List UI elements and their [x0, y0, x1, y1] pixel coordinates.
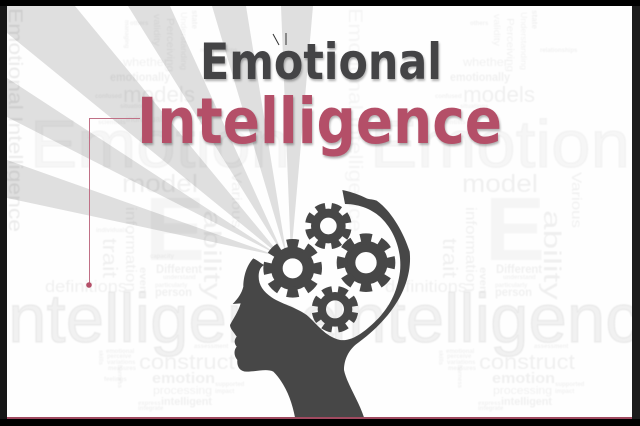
word cloud: right copy: emotional [446, 349, 475, 355]
word cloud: left copy: E [145, 180, 205, 280]
word cloud: left copy: Emotional Intelligence [4, 8, 25, 232]
word cloud: left copy: relationships [200, 48, 238, 54]
word cloud: right copy: assessment [534, 344, 568, 350]
icon: head silhouette with gears [230, 190, 410, 417]
word cloud: right copy: processing [493, 385, 552, 397]
word cloud: left copy: models [123, 82, 195, 107]
title: Emotional: Emotional [200, 33, 442, 91]
word cloud: left copy: capacity [150, 254, 175, 260]
head silhouette [230, 190, 410, 417]
word cloud: right copy: emotion [492, 370, 555, 387]
word cloud: right copy: Different [496, 262, 542, 276]
word cloud: right copy: Understanding [519, 12, 528, 70]
word cloud: left copy: particularly [155, 283, 188, 289]
word cloud: right copy: emotionally [450, 70, 510, 84]
word cloud: right copy: definitions [385, 277, 467, 296]
word cloud: right copy: measures [448, 366, 477, 372]
word cloud: right copy: supported [555, 382, 585, 388]
word cloud: left copy: emotional [106, 349, 135, 355]
word cloud: left copy: understand [163, 275, 196, 281]
word cloud: right copy: Emotion [370, 107, 630, 182]
word cloud: left copy: information [122, 207, 139, 292]
title: Intelligence: Intelligence [137, 85, 502, 158]
word cloud: left copy: skills [97, 350, 103, 366]
word cloud: right copy: understand [503, 275, 536, 281]
word cloud: left copy: supported [215, 382, 245, 388]
word cloud: left copy: express [138, 401, 161, 407]
word cloud: left copy: model [122, 170, 198, 198]
word cloud: right copy: ability [538, 210, 565, 300]
word cloud: left copy: confused [95, 94, 122, 100]
word cloud: left copy: processing [153, 385, 212, 397]
word cloud: left copy: emotion [152, 370, 215, 387]
word cloud: left copy: ability [198, 210, 225, 300]
word cloud: right copy: construct [479, 351, 575, 374]
word cloud: left copy: others [130, 21, 149, 27]
word cloud: left copy: assessment [194, 344, 228, 350]
word cloud: right copy: scientists [438, 120, 466, 126]
word cloud: right copy: person [495, 285, 532, 299]
word cloud: right copy: relationships [540, 48, 578, 54]
word cloud: left copy: integrate [138, 406, 164, 412]
word cloud: left copy: measures [108, 366, 137, 372]
word cloud: right copy: model [462, 170, 538, 198]
word cloud: right copy: intelligent [501, 396, 552, 408]
word cloud: right copy: information [462, 207, 479, 292]
bottom maroon rule [7, 417, 632, 419]
word cloud: right copy: particularly [495, 283, 528, 289]
word cloud: left copy: situations [120, 104, 149, 110]
word cloud: left copy: definitions [45, 277, 127, 296]
word cloud: left copy: person [155, 285, 192, 299]
connector line with dot [86, 118, 140, 288]
word cloud: left copy: harness [116, 365, 122, 389]
word cloud: right copy: variations [447, 360, 476, 366]
word cloud: right copy: Emotional Intelligence [344, 8, 365, 232]
word cloud: left copy: construct [139, 351, 235, 374]
word cloud: right copy: Perceiving [504, 18, 515, 72]
word cloud: left copy: Perceiving [164, 18, 175, 72]
word cloud: right copy: perceive [447, 354, 472, 360]
gear: top [309, 207, 348, 245]
word cloud: right copy: others [470, 21, 489, 27]
word cloud: right copy: models [463, 82, 535, 107]
word cloud: left copy: individuals [96, 228, 128, 234]
sunburst rays [7, 6, 313, 258]
word cloud: right copy: harness [456, 365, 462, 389]
word cloud: right copy: trait [438, 238, 460, 279]
word cloud: left copy: whether [122, 55, 168, 69]
word cloud: right copy: skills [437, 350, 443, 366]
word cloud: left copy: feelings [104, 377, 127, 383]
word cloud: left copy: impact [215, 389, 234, 395]
word cloud: left copy: managing [123, 20, 129, 49]
word cloud: right copy [329, 8, 640, 412]
word cloud: left copy: validity [152, 14, 162, 47]
word cloud: left copy: emotionally [110, 70, 170, 84]
word cloud: right copy: whether [462, 55, 508, 69]
word cloud: left copy: intelligent [161, 396, 212, 408]
word cloud: right copy: E [485, 180, 545, 280]
word cloud: right copy: validity [492, 14, 502, 47]
word cloud: right copy: state [530, 10, 539, 30]
word cloud: right copy: express [478, 401, 501, 407]
word cloud: left copy [0, 8, 338, 412]
word cloud: left copy: trait [98, 238, 120, 279]
word cloud: left copy: perceive [107, 354, 132, 360]
small ticks above title [273, 33, 286, 45]
gear: left [269, 244, 317, 292]
word cloud: left copy: variations [107, 360, 136, 366]
word cloud: left copy: even [137, 267, 148, 293]
gear: right [342, 239, 390, 287]
word cloud: right copy: impact [555, 389, 574, 395]
word cloud: left copy: state [190, 10, 199, 30]
word cloud: left copy: Understanding [179, 12, 188, 70]
word cloud: right copy: confused [435, 94, 462, 100]
word cloud: left copy: individual [126, 114, 162, 124]
word cloud: right copy: integrate [478, 406, 504, 412]
word cloud: left copy: Various [229, 172, 245, 228]
word cloud: left copy: Different [156, 262, 202, 276]
gear: bottom [316, 290, 354, 329]
word cloud: left copy: scientists [98, 120, 126, 126]
word cloud: right copy: situations [460, 104, 489, 110]
word cloud: right copy: even [477, 267, 488, 293]
word cloud: right copy: Various [569, 172, 585, 228]
word cloud: left copy: Emotion [30, 107, 290, 182]
